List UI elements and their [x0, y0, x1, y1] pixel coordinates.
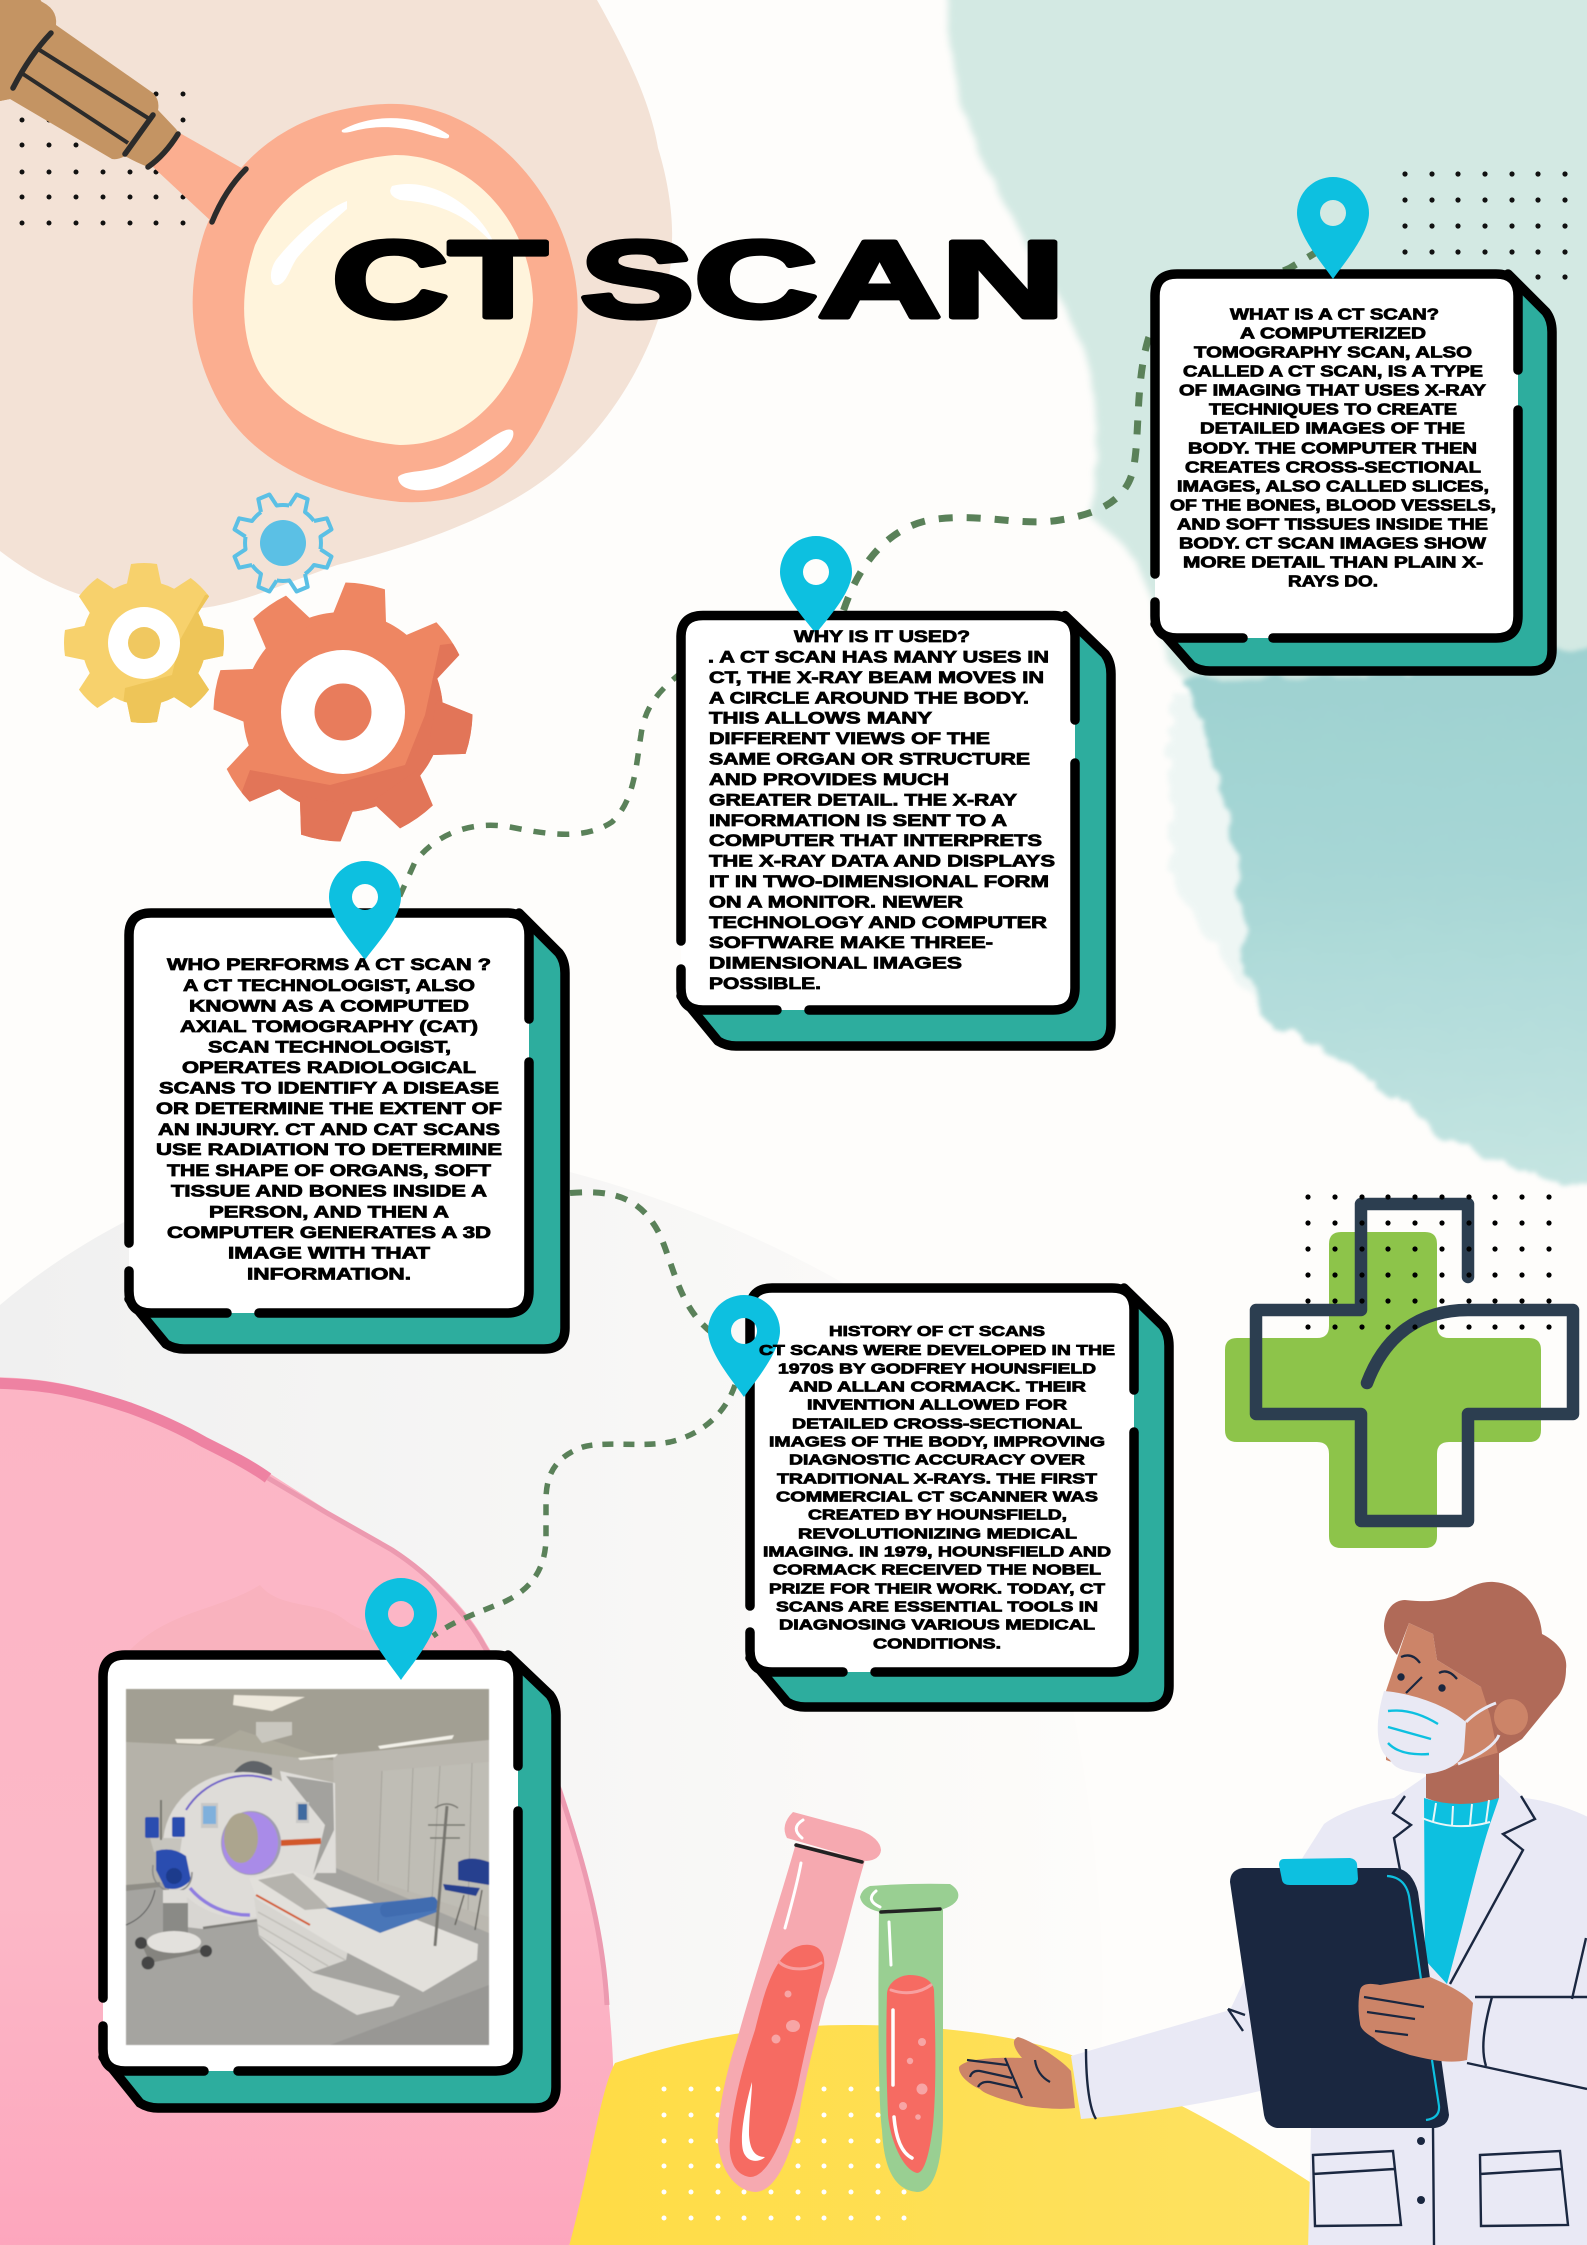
text block: why is it used: DIFFERENT VIEWS OF THE [709, 729, 990, 748]
text block: who performs a CT scan: OR DETERMINE THE EXTENT OF [156, 1099, 502, 1118]
background blob: faded teal wash [1170, 690, 1340, 1060]
text block: history of CT scans: CONDITIONS. [873, 1635, 1001, 1652]
text block: why is it used: . A CT SCAN HAS MANY USES IN [708, 647, 1049, 666]
title [332, 219, 1065, 341]
text block: who performs a CT scan: THE SHAPE OF ORGANS, SOFT [167, 1161, 491, 1180]
background blob: teal watercolor [1185, 640, 1587, 1195]
text block: what is a CT scan: CALLED A CT SCAN, IS A TYPE [1183, 363, 1483, 380]
icon: medical cross [1225, 1194, 1573, 1548]
neck [1426, 1752, 1499, 1805]
text block: who performs a CT scan: AN INJURY. CT AND CAT SCANS [158, 1120, 500, 1139]
text block: what is a CT scan: DETAILED IMAGES OF THE [1200, 420, 1465, 437]
text block: history of CT scans: REVOLUTIONIZING MEDICAL [798, 1525, 1077, 1542]
text block: who performs a CT scan: OPERATES RADIOLOGICAL [182, 1058, 476, 1077]
panel: CT scanner photo [103, 1578, 556, 2108]
text block: who performs a CT scan: WHO PERFORMS A CT SCAN ? [167, 955, 491, 974]
connector: card three to card four [570, 1192, 715, 1335]
icon: yellow gear [64, 563, 224, 723]
text block: what is a CT scan: CREATES CROSS-SECTIONAL [1185, 459, 1481, 476]
text block: who performs a CT scan: INFORMATION. [247, 1264, 411, 1283]
text block: why is it used: IT IN TWO-DIMENSIONAL FORM [709, 872, 1049, 891]
title: SCAN [580, 219, 1065, 341]
text block: why is it used: THIS ALLOWS MANY [709, 709, 932, 728]
text block: why is it used: A CIRCLE AROUND THE BODY. [709, 688, 1029, 707]
text block: history of CT scans: IMAGES OF THE BODY, IMPROVING [769, 1433, 1105, 1450]
panel: history of CT scans [708, 1288, 1169, 1707]
dot grid: white on yellow [662, 2086, 906, 2220]
background blob: mint watercolor [945, 0, 1587, 695]
text block: what is a CT scan: BODY. CT SCAN IMAGES SHOW [1179, 535, 1486, 552]
icon: map pin [365, 1578, 437, 1680]
icon: map pin [329, 861, 401, 960]
text block: history of CT scans: IMAGING. IN 1979, HOUNSFIELD AND [763, 1543, 1111, 1560]
text block: history of CT scans: DIAGNOSTIC ACCURACY OVER [789, 1451, 1085, 1468]
icon: blue outline gear [229, 489, 337, 597]
text block: who performs a CT scan: SCANS TO IDENTIFY A DISEASE [159, 1079, 499, 1098]
text block: what is a CT scan: WHAT IS A CT SCAN? [1230, 306, 1439, 323]
right hand [1358, 1977, 1473, 2062]
text block: history of CT scans: COMMERCIAL CT SCANNER WAS [776, 1488, 1098, 1505]
left hand [959, 2037, 1075, 2109]
icon: pink test tube [718, 1812, 881, 2192]
text block: why is it used: AND PROVIDES MUCH [709, 770, 949, 789]
text block: what is a CT scan: TECHNIQUES TO CREATE [1209, 401, 1457, 418]
text block: history of CT scans: INVENTION ALLOWED FOR [807, 1396, 1067, 1413]
text block: why is it used: INFORMATION IS SENT TO A [709, 811, 1007, 830]
image: CT scanner room [126, 1689, 489, 2045]
background blob: beige [0, 0, 672, 609]
text block: why is it used: THE X-RAY DATA AND DISPLAYS [709, 852, 1055, 871]
text block: what is a CT scan: TOMOGRAPHY SCAN, ALSO [1194, 344, 1472, 361]
text block: who performs a CT scan: SCAN TECHNOLOGIST, [208, 1037, 451, 1056]
text block: why is it used: SAME ORGAN OR STRUCTURE [709, 750, 1030, 768]
text block: history of CT scans: AND ALLAN CORMACK. THEIR [789, 1378, 1086, 1395]
text block: who performs a CT scan: TISSUE AND BONES INSIDE A [171, 1181, 487, 1200]
text block: why is it used: COMPUTER THAT INTERPRETS [709, 831, 1042, 850]
text block: what is a CT scan [1170, 306, 1496, 590]
text block: history of CT scans: CORMACK RECEIVED THE NOBEL [773, 1561, 1101, 1578]
text block: why is it used: GREATER DETAIL. THE X-RAY [709, 790, 1017, 809]
clipboard [1230, 1868, 1449, 2128]
text block: what is a CT scan: IMAGES, ALSO CALLED SLICES, [1177, 478, 1489, 495]
text block: who performs a CT scan: COMPUTER GENERATES A 3D [167, 1223, 491, 1242]
text block: who performs a CT scan: AXIAL TOMOGRAPHY (CAT) [180, 1017, 478, 1036]
text block: who performs a CT scan: PERSON, AND THEN A [209, 1202, 449, 1221]
text block: who performs a CT scan: A CT TECHNOLOGIST, ALSO [183, 976, 475, 995]
text block: who performs a CT scan: IMAGE WITH THAT [228, 1243, 430, 1262]
text block: what is a CT scan: A COMPUTERIZED [1240, 325, 1426, 342]
icon: magnifying glass [0, 0, 578, 502]
text block: history of CT scans: DETAILED CROSS-SECTIONAL [792, 1415, 1082, 1432]
dot grid: top right [1402, 171, 1568, 280]
text block: why is it used: ON A MONITOR. NEWER [709, 892, 963, 911]
sweater [1424, 1798, 1499, 1984]
icon: map pin [1297, 177, 1369, 279]
connector: card one to card two [843, 250, 1320, 612]
panel: who performs a CT scan [129, 861, 565, 1349]
panel: why is it used [681, 536, 1111, 1046]
icon: green test tube [860, 1884, 958, 2192]
text block: who performs a CT scan: USE RADIATION TO DETERMINE [156, 1140, 502, 1159]
illustration: doctor [959, 1582, 1587, 2245]
mask [1378, 1691, 1466, 1774]
text block: history of CT scans: HISTORY OF CT SCANS [829, 1323, 1045, 1340]
text block: what is a CT scan: MORE DETAIL THAN PLAIN X- [1183, 554, 1483, 571]
panel: what is a CT scan [1155, 177, 1552, 671]
text block: history of CT scans: 1970S BY GODFREY HOUNSFIELD [778, 1360, 1096, 1377]
background blob: pink [0, 1377, 614, 2245]
background blob: yellow [568, 2025, 1330, 2245]
text block: why is it used: WHY IS IT USED? [794, 627, 970, 646]
icon: map pin [708, 1295, 780, 1397]
text block: history of CT scans: SCANS ARE ESSENTIAL TOOLS IN [776, 1598, 1098, 1615]
text block: history of CT scans: DIAGNOSING VARIOUS MEDICAL [779, 1616, 1095, 1633]
text block: history of CT scans: TRADITIONAL X-RAYS. THE FIRST [777, 1470, 1097, 1487]
connector: card four to photo [433, 1385, 735, 1636]
icon: orange gear [211, 580, 475, 844]
text block: history of CT scans [759, 1323, 1115, 1652]
icon: map pin [780, 536, 852, 634]
text block: why is it used [708, 627, 1055, 993]
text block: history of CT scans: CT SCANS WERE DEVELOPED IN THE [759, 1342, 1115, 1359]
lab coat [1071, 1774, 1587, 2245]
text block: why is it used: POSSIBLE. [709, 974, 821, 993]
text block: why is it used: TECHNOLOGY AND COMPUTER [709, 913, 1047, 932]
dot grid: top left [20, 92, 186, 226]
text block: what is a CT scan: AND SOFT TISSUES INSIDE THE [1177, 516, 1488, 533]
text block: what is a CT scan: RAYS DO. [1288, 573, 1378, 590]
text block: what is a CT scan: BODY. THE COMPUTER THEN [1188, 440, 1477, 457]
title: CT [332, 219, 547, 341]
head [1386, 1623, 1500, 1774]
text block: what is a CT scan: OF IMAGING THAT USES X-RAY [1179, 382, 1487, 399]
text block: why is it used: SOFTWARE MAKE THREE- [709, 933, 993, 952]
text block: what is a CT scan: OF THE BONES, BLOOD VESSELS, [1170, 497, 1496, 514]
text block: why is it used: DIMENSIONAL IMAGES [709, 954, 962, 973]
connector: card two to card three [398, 672, 682, 900]
text block: who performs a CT scan [156, 955, 502, 1283]
coat lines [1086, 1796, 1587, 2245]
text block: history of CT scans: PRIZE FOR THEIR WORK. TODAY, CT [769, 1580, 1105, 1597]
text block: history of CT scans: CREATED BY HOUNSFIELD, [808, 1506, 1067, 1523]
text block: why is it used: CT, THE X-RAY BEAM MOVES IN [709, 668, 1044, 687]
text block: who performs a CT scan: KNOWN AS A COMPUTED [189, 996, 469, 1015]
background blob: gray [0, 1148, 1103, 2070]
